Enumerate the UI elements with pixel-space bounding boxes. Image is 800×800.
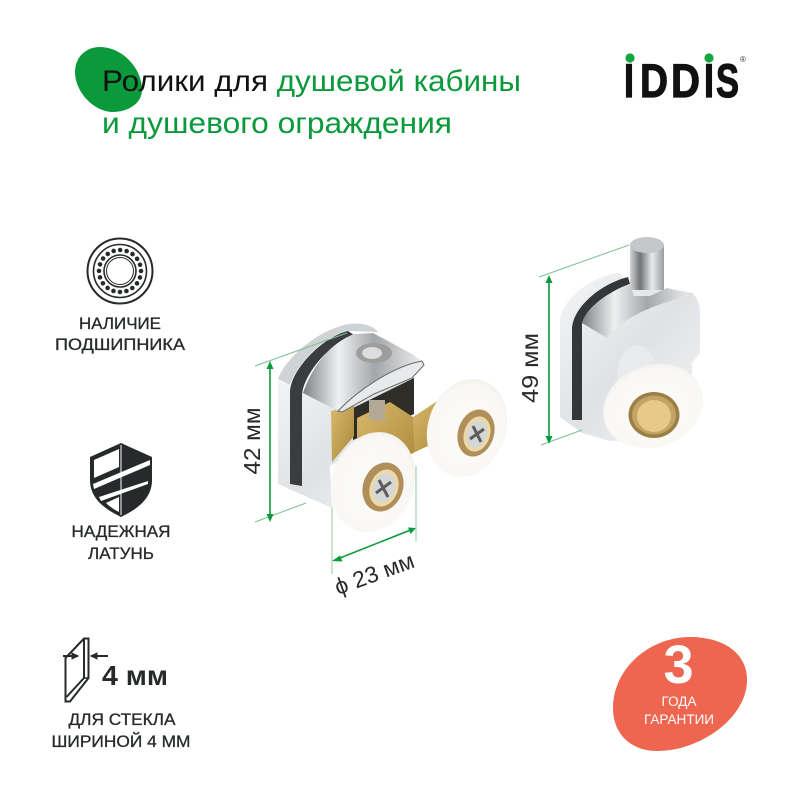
icon: bearing [88, 238, 152, 304]
left shoulder [278, 323, 378, 385]
logo: IDDIS: I [704, 54, 714, 107]
logo: IDDIS: S [716, 54, 739, 107]
housing [560, 273, 700, 441]
cap screw [356, 343, 392, 363]
warranty badge: ГАРАНТИИ [644, 712, 714, 727]
dimension: diameter 23 mm: ϕ 23 мм [331, 547, 418, 600]
value: 4 mm: 4 мм [102, 660, 168, 691]
logo: IDDIS: D [640, 54, 668, 107]
decorative green blob [75, 47, 142, 112]
product: right single roller [560, 237, 715, 462]
label: glass: ДЛЯ СТЕКЛА [68, 711, 176, 729]
logo: IDDIS: ® [740, 55, 746, 64]
label: brass: НАДЕЖНАЯ [72, 523, 170, 541]
label: glass second line: ШИРИНОЙ 4 ММ [52, 732, 190, 751]
glass slot [290, 331, 354, 486]
thread [369, 400, 385, 420]
dimension: 49 mm [517, 245, 629, 445]
label: brass second line: ЛАТУНЬ [88, 545, 154, 563]
logo: IDDIS: I [624, 54, 634, 107]
chrome cap [303, 333, 422, 411]
label: bearing second line: ПОДШИПНИКА [55, 336, 185, 354]
cap lip [338, 361, 424, 412]
rear wheel [414, 368, 520, 488]
chrome cap [582, 285, 690, 338]
product: left double roller [278, 323, 520, 544]
pin [630, 237, 664, 292]
warranty badge: 3 [663, 635, 694, 695]
title: и душевого ограждения [102, 107, 452, 140]
wheel [591, 350, 715, 462]
dimension: 49 mm: 49 мм [517, 333, 543, 403]
logo: IDDIS: D [671, 54, 700, 107]
logo: IDDIS [624, 53, 746, 107]
brass arm [413, 396, 456, 452]
glass slot [572, 277, 630, 420]
dimension: 42 mm: 42 мм [239, 408, 265, 474]
title: Ролики для душевой кабины [102, 65, 521, 98]
icon: glass thickness [63, 638, 108, 702]
dimension: diameter 23 mm [331, 466, 418, 600]
warranty badge: ГОДА [662, 694, 696, 709]
chrome housing [278, 370, 414, 508]
housing recess [617, 345, 657, 405]
brass block [331, 406, 354, 462]
inner dark gap [353, 378, 414, 440]
label: bearing: НАЛИЧИЕ [79, 315, 161, 333]
warranty badge [613, 635, 747, 751]
title [102, 65, 521, 140]
icon: shield [90, 443, 152, 517]
dimension: 42 mm [239, 333, 347, 522]
front wheel [317, 420, 429, 544]
